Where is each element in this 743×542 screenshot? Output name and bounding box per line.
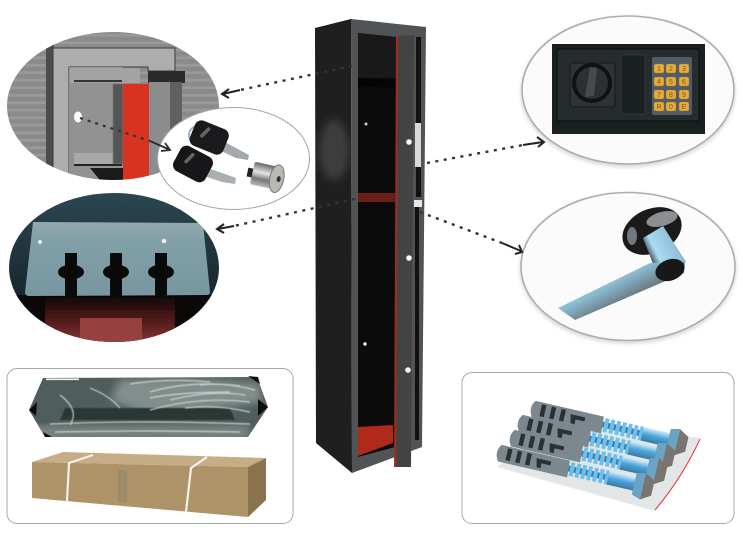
keypad <box>652 57 692 115</box>
panel: keypad lock oval <box>522 16 734 164</box>
icon: chrome handle <box>558 198 689 320</box>
arrow: hole to keys <box>80 118 170 151</box>
dial <box>570 63 615 107</box>
panel: fixing bolts <box>462 372 734 524</box>
safe left side <box>315 19 352 473</box>
safe interior <box>358 33 397 457</box>
keypad: 4 <box>657 79 661 86</box>
handle stub <box>414 200 422 207</box>
rack slots <box>58 253 174 298</box>
panel: gun rack close-up oval <box>5 190 225 345</box>
arrow: to hinge close-up <box>222 66 352 98</box>
electronic lock body <box>552 44 705 134</box>
panel: door hinge close-up oval <box>7 32 219 180</box>
icon: lock cylinder <box>244 159 286 194</box>
keypad: E <box>682 104 687 111</box>
keypad: 6 <box>682 79 686 86</box>
red rack shelf <box>358 193 395 202</box>
bolts and wall plugs <box>494 395 690 502</box>
right frame slots <box>416 37 421 197</box>
keypad: 7 <box>657 92 661 99</box>
wrapped safe in bubble film <box>29 376 268 440</box>
arrow: to handle <box>420 212 522 254</box>
keypad: 9 <box>682 92 686 99</box>
keypad: 5 <box>669 79 673 86</box>
latch plate <box>415 123 421 167</box>
keypad: 3 <box>682 66 686 73</box>
arrow: to keypad <box>427 137 544 163</box>
safe front frame <box>351 19 426 473</box>
panel: packaging <box>7 368 293 524</box>
red door strip <box>123 84 149 186</box>
open door <box>396 35 414 467</box>
main image: open gun safe <box>315 19 426 473</box>
arrow: to rack close-up <box>217 199 355 233</box>
grey door edge <box>149 82 170 176</box>
keypad: 1 <box>657 66 661 73</box>
cardboard box <box>32 452 266 517</box>
lock hole <box>74 112 82 122</box>
box straps <box>67 455 93 501</box>
plastic bag <box>497 420 700 511</box>
red floor <box>358 425 393 456</box>
keypad: 0 <box>669 104 673 111</box>
icon: upper key <box>187 118 249 160</box>
rack plate <box>25 222 210 296</box>
keypad: 8 <box>669 92 673 99</box>
keypad: 2 <box>669 66 673 73</box>
interior bolts <box>364 122 368 126</box>
panel: handle oval <box>521 192 735 340</box>
red bag seal <box>655 439 700 510</box>
panel: keys oval <box>158 108 310 210</box>
battery cover <box>621 55 645 114</box>
keypad: R <box>656 104 662 111</box>
dark hinge strip <box>148 71 185 83</box>
icon: lower key <box>171 143 236 185</box>
door holes <box>406 139 412 145</box>
door frame <box>53 48 175 185</box>
